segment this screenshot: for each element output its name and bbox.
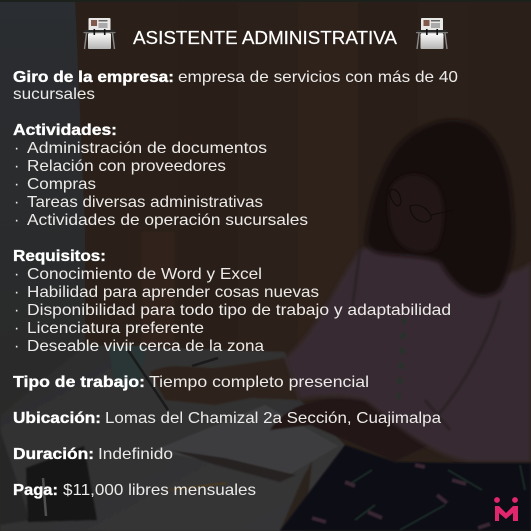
right desk leg [280, 462, 312, 531]
blouse [285, 245, 531, 462]
text block: requirements: Deseable vivir cerca de la zona [27, 338, 264, 355]
title: ASISTENTE ADMINISTRATIVA [133, 28, 397, 48]
black notebook [26, 446, 97, 522]
icon: left card file [84, 18, 116, 49]
laptop edge [0, 430, 30, 525]
text block: pay: $11,000 libres mensuales [63, 482, 256, 499]
text block: pay: Paga: [13, 482, 58, 499]
text block: duration: Duración: [13, 446, 94, 463]
header [84, 18, 448, 49]
mug [108, 346, 146, 388]
text block: activities: · [14, 158, 19, 175]
pen and marker [128, 350, 218, 410]
text block: activities [13, 122, 308, 229]
desk surface [0, 345, 345, 531]
text block: duration: Indefinido [98, 446, 173, 463]
open white notebook [155, 405, 338, 482]
face [389, 174, 444, 252]
hands and forearm [150, 358, 430, 462]
grey wall strip [0, 0, 85, 415]
sleeve fold [352, 250, 500, 430]
top edge shade [0, 0, 531, 2]
text block: activities: Compras [27, 176, 96, 193]
text block: duration [13, 446, 173, 463]
text block: job type [13, 374, 369, 391]
text block: requirements: Conocimiento de Word y Excel [27, 266, 262, 283]
yellow pencil [170, 483, 226, 490]
icon: right card file [416, 18, 448, 49]
text block: requirements: Disponibilidad para todo tipo de trabajo y adaptabilidad [27, 302, 451, 319]
text block: company line: empresa de servicios con más de 40 [178, 69, 458, 86]
text block: activities: Tareas diversas administrativas [27, 194, 263, 211]
text block: company line: sucursales [13, 86, 95, 103]
text block: requirements [13, 248, 451, 355]
text block: requirements: Habilidad para aprender cosas nuevas [27, 284, 319, 301]
text block: requirements: · [14, 320, 19, 337]
text block: company line [13, 69, 458, 103]
skirt floral accents [312, 465, 525, 530]
text block: activities: · [14, 140, 19, 157]
text block: requirements: · [14, 302, 19, 319]
text block: activities: Relación con proveedores [27, 158, 226, 175]
text block: company line: Giro de la empresa: [13, 69, 174, 86]
text block: location: Ubicación: [13, 410, 101, 427]
text block: requirements: · [14, 338, 19, 355]
text block: requirements: · [14, 266, 19, 283]
text block: activities: · [14, 176, 19, 193]
text block: job type: Tipo de trabajo: [13, 374, 145, 391]
text block: activities: · [14, 194, 19, 211]
text block: activities: · [14, 212, 19, 229]
text block: location: Lomas del Chamizal 2a Sección, Cuajimalpa [105, 410, 441, 427]
hair [366, 120, 514, 296]
icon: pink smiling M logo [494, 497, 518, 521]
text block: requirements: · [14, 284, 19, 301]
necklace beads [398, 318, 405, 400]
dark skirt [280, 445, 531, 531]
text block: activities: Actividades: [13, 122, 117, 139]
text block: activities: Administración de documentos [27, 140, 267, 157]
glasses [389, 189, 454, 222]
text block: job type: Tiempo completo presencial [149, 374, 369, 391]
text block: requirements: Requisitos: [13, 248, 106, 265]
text block: activities: Actividades de operación sucursales [27, 212, 308, 229]
stylus [43, 478, 46, 516]
text block: requirements: Licenciatura preferente [27, 320, 204, 337]
